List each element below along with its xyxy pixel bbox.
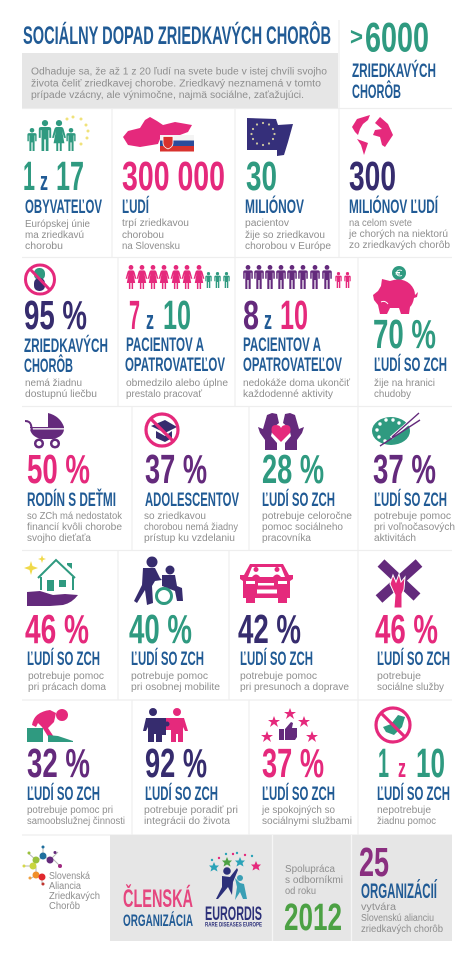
description: pomoc sociálneho — [262, 522, 344, 533]
icon: house on hand — [24, 555, 78, 606]
description — [348, 218, 451, 251]
description: so ZCh má nedostatok — [27, 511, 122, 522]
description — [25, 378, 97, 400]
label: ĽUDÍ SO ZCH — [262, 783, 335, 805]
panel: 1 in 17 — [23, 116, 102, 252]
icon: Eurordis figures and stars — [209, 852, 261, 900]
description — [361, 902, 444, 935]
description: obmedzilo alebo úplne — [126, 378, 229, 389]
description: so zriedkavou — [144, 511, 206, 522]
panel: 30 million — [245, 118, 332, 252]
description — [374, 511, 455, 544]
panel: footer grey band — [110, 835, 452, 941]
description: potrebuje pomoc — [374, 511, 451, 522]
description — [243, 378, 350, 400]
description: samoobslužnej činnosti — [27, 816, 125, 827]
label: MILIÓNOV — [245, 196, 304, 218]
panel: 40 percent mobility — [129, 556, 221, 693]
description: potrebuje pomoc — [240, 671, 317, 682]
panel: 25 organisations — [359, 839, 444, 935]
label: ĽUDÍ SO ZCH — [145, 783, 218, 805]
number: 10 — [163, 292, 191, 338]
number: 46 % — [375, 606, 438, 652]
description — [240, 671, 350, 693]
description — [28, 671, 107, 693]
number: 28 % — [262, 446, 324, 492]
label: ADOLESCENTOV — [145, 490, 239, 511]
panel: 300 million people — [348, 115, 451, 251]
logo text: Aliancia — [49, 881, 82, 892]
description: na celom svete — [349, 218, 413, 229]
label: OPATROVATEĽOV — [243, 355, 342, 376]
icon: two people with puzzle pieces — [143, 708, 188, 742]
icon: crossed-out pill — [26, 265, 54, 294]
number: z — [264, 305, 272, 335]
description — [285, 864, 343, 897]
description: potrebuje pomoc — [28, 671, 104, 682]
icon: Slovakia map and flag — [123, 117, 194, 152]
number: 32 % — [27, 740, 90, 786]
description: potrebuje pomoc pri — [27, 805, 113, 816]
Eurordis wordmark — [205, 904, 262, 928]
panel: member organisation — [123, 852, 262, 930]
panel: 8 of 10 — [243, 265, 351, 400]
panel: intro text: prípade vzácny, ale výnimočne, najmä sociálne, zaťažujúci. — [31, 90, 304, 101]
description: zriedkavých chorôb — [361, 924, 444, 935]
icon: molecule logo — [22, 846, 62, 886]
label: PACIENTOV A — [243, 335, 321, 356]
description: je chorých na niektorú — [348, 229, 448, 240]
description: od roku — [285, 886, 316, 897]
panel: 92 percent integration — [143, 708, 238, 827]
icon: person pushing wheelchair — [134, 556, 183, 605]
description: ma zriedkavú — [25, 230, 84, 241]
number: 95 % — [24, 292, 87, 338]
icon: people row purple and pink — [243, 265, 351, 289]
panel: 37 percent satisfied — [261, 708, 352, 827]
label: RODÍN S DEŤMI — [27, 489, 116, 511]
description: vytvára — [361, 902, 397, 913]
description: žije so zriedkavou — [245, 230, 325, 241]
panel: 42 percent transport — [238, 564, 350, 693]
label — [125, 335, 225, 376]
panel: 32 percent self-care — [27, 709, 125, 827]
icon: person bending over box — [27, 709, 73, 742]
number: 37 % — [262, 740, 324, 786]
description: Spolupráca — [285, 864, 336, 875]
panel: Slovak alliance logo — [22, 846, 100, 912]
description: dostupnú liečbu — [25, 389, 97, 400]
number: 70 % — [373, 311, 436, 357]
number: 17 — [56, 153, 84, 199]
icon: piggy bank with coin — [373, 266, 418, 314]
Eurordis wordmark: EURORDIS — [205, 904, 262, 925]
panel: 300 000 — [122, 117, 225, 252]
panel: 70 percent — [373, 266, 447, 400]
description — [27, 805, 125, 827]
logo text — [49, 871, 100, 912]
panel: 37 percent adolescents — [144, 414, 239, 544]
description: chorobu — [25, 241, 63, 252]
panel: 95 percent — [24, 265, 108, 400]
panel: over 6000 rare diseases — [350, 14, 436, 103]
description: pacientov — [245, 218, 289, 229]
panel: 50 percent — [25, 413, 123, 544]
number — [23, 153, 84, 199]
panel: 28 percent — [258, 413, 353, 544]
description: chorobou nemá žiadny — [144, 522, 238, 533]
label: ĽUDÍ SO ZCH — [262, 489, 335, 511]
number: 50 % — [27, 446, 90, 492]
description — [261, 805, 352, 827]
icon: family with EU stars — [27, 116, 89, 151]
logo text: Slovenská — [49, 871, 90, 882]
description: nemá žiadnu — [25, 378, 82, 389]
description: integrácii do života — [144, 816, 231, 827]
icon: paint palette and brushes — [372, 413, 420, 446]
number: 25 — [359, 839, 389, 885]
number: 6000 — [365, 14, 429, 60]
number: 42 % — [238, 606, 301, 652]
label: OBYVATEĽOV — [25, 197, 102, 218]
description: chudoby — [374, 389, 411, 400]
description: svojho dieťaťa — [27, 533, 92, 544]
description — [25, 219, 91, 252]
description: sociálnymi službami — [262, 816, 352, 827]
description: potrebuje pomoc — [131, 671, 208, 682]
description — [144, 511, 238, 544]
description: potrebuje — [377, 671, 422, 682]
subheading: ORGANIZÁCIA — [123, 911, 193, 930]
label: CHORÔB — [24, 355, 73, 377]
label — [352, 60, 436, 103]
description — [131, 671, 221, 693]
label — [24, 335, 108, 377]
number: 10 — [280, 292, 308, 338]
description: aktivitách — [374, 533, 416, 544]
label: ĽUDÍ SO ZCH — [240, 648, 313, 670]
number: 30 — [246, 153, 277, 199]
number: z — [398, 753, 406, 783]
icon: hands holding heart — [258, 413, 304, 450]
description — [245, 218, 332, 252]
panel: intro text: Odhaduje sa, že až 1 z 20 ľudí na svete bude v istej chvíli svojho — [31, 66, 328, 78]
icon: crossed-out hand — [376, 708, 410, 742]
icon: stroller — [25, 413, 64, 447]
description: každodenné aktivity — [243, 389, 333, 400]
label: ĽUDÍ SO ZCH — [131, 648, 204, 670]
description: prestalo pracovať — [126, 389, 202, 400]
description: potrebuje celoročne — [262, 511, 353, 522]
description: chorobou v Európe — [245, 241, 332, 252]
description — [262, 511, 353, 544]
number: 7 — [129, 292, 140, 338]
number — [129, 292, 191, 338]
description — [144, 805, 238, 827]
icon: crossed-out graduation cap — [146, 414, 178, 446]
description: Slovenskú alianciu — [361, 913, 434, 924]
icon: people row pink and green — [126, 265, 230, 289]
label: PACIENTOV A — [126, 335, 204, 356]
number: 1 — [23, 153, 35, 199]
description: financií kvôli chorobe — [27, 522, 123, 533]
panel: cooperation since 2012 — [284, 864, 343, 939]
panel: 37 percent leisure — [372, 413, 455, 544]
description: pri osobnej mobilite — [131, 682, 221, 693]
Eurordis wordmark: RARE DISEASES EUROPE — [205, 922, 262, 928]
icon: globe — [352, 115, 393, 155]
description: zo zriedkavých chorôb — [349, 240, 451, 251]
label — [243, 335, 342, 376]
number: 10 — [416, 740, 445, 786]
icon: thumbs up with stars — [261, 708, 318, 742]
description: pracovníka — [262, 533, 312, 544]
number: 300 — [349, 153, 396, 199]
description — [122, 218, 189, 252]
description: Európskej únie — [25, 219, 91, 230]
panel: intro text — [22, 53, 338, 108]
number — [378, 740, 445, 786]
logo text: Chorôb — [49, 901, 81, 912]
description: nepotrebuje — [377, 805, 432, 816]
description: pri presunoch a doprave — [240, 682, 350, 693]
number: 40 % — [129, 606, 192, 652]
description: pri prácach doma — [28, 682, 107, 693]
number: 8 — [243, 292, 259, 338]
panel: 46 percent housework — [24, 555, 107, 693]
number — [243, 292, 308, 338]
number: z — [40, 166, 48, 196]
description: na Slovensku — [122, 241, 180, 252]
description — [27, 511, 123, 544]
number: > — [350, 23, 363, 51]
description: sociálne služby — [377, 682, 444, 693]
description: potrebuje poradiť pri — [144, 805, 238, 816]
description — [126, 378, 229, 400]
label: OPATROVATEĽOV — [125, 355, 225, 376]
number: 37 % — [145, 446, 207, 492]
label: ĽUDÍ SO ZCH — [27, 648, 100, 670]
panel: 7 of 10 — [125, 265, 230, 400]
label: ZRIEDKAVÝCH — [24, 335, 108, 357]
panel: 46 percent social services — [375, 563, 450, 693]
description: prístup ku vzdelaniu — [144, 533, 235, 544]
description: chorobou — [122, 230, 164, 241]
description — [377, 671, 444, 693]
icon: car — [240, 564, 293, 603]
description: je spokojných so — [261, 805, 336, 816]
logo text: Zriedkavých — [49, 891, 100, 902]
description: žije na hranici — [374, 378, 435, 389]
description: s odborníkmi — [285, 875, 343, 886]
icon: crossed hands — [379, 563, 419, 608]
number — [350, 14, 429, 60]
description — [374, 378, 435, 400]
description: nedokáže doma ukončiť — [243, 378, 350, 389]
description: pri voľnočasových — [374, 522, 455, 533]
number: 300 000 — [122, 153, 225, 199]
number: 46 % — [25, 606, 89, 652]
number: 92 % — [145, 740, 207, 786]
number: 1 — [378, 740, 389, 786]
label: ĽUDÍ SO ZCH — [27, 783, 100, 805]
number: z — [146, 305, 154, 335]
label: ĽUDÍ — [122, 196, 149, 218]
panel: intro text: života čeliť zriedkavej chorobe. Zriedkavý neznamená v tomto — [31, 78, 322, 90]
number: 37 % — [373, 446, 436, 492]
description — [377, 805, 436, 827]
panel: 1 of 10 no help — [376, 708, 450, 827]
heading: ČLENSKÁ — [123, 883, 193, 913]
description: trpí zriedkavou — [122, 218, 189, 229]
icon: EU flag — [247, 118, 293, 156]
year: 2012 — [284, 897, 342, 939]
description: žiadnu pomoc — [377, 816, 436, 827]
label: CHORÔB — [352, 81, 401, 103]
